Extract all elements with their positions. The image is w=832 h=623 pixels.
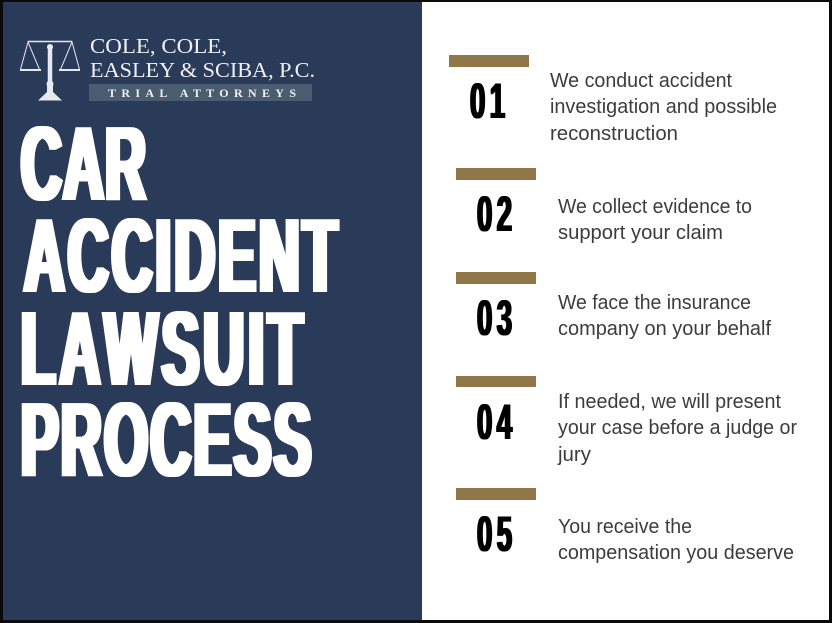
step 01 — [449, 55, 777, 145]
step 05 — [456, 488, 794, 564]
step 03 — [456, 272, 771, 346]
step 05: compensation you deserve — [558, 542, 794, 564]
step 02 — [456, 168, 752, 244]
title: PROCESS — [21, 380, 314, 498]
step 04: jury — [557, 444, 591, 466]
title: LAWSUIT — [21, 289, 307, 407]
step 05: You receive the — [558, 516, 692, 538]
step 03: 03 — [477, 289, 516, 346]
step 05: 05 — [477, 505, 516, 562]
panel: white right — [422, 2, 829, 620]
logo tagline: TRIAL ATTORNEYS — [108, 86, 296, 100]
step 04: your case before a judge or — [558, 417, 797, 439]
step 03: We face the insurance — [558, 292, 751, 314]
logo: Cole, Cole, Easley & Sciba — [20, 34, 315, 101]
logo: Cole, Cole, Easley & Sciba: EASLEY & SCIBA, P.C. — [90, 58, 315, 82]
title: CAR — [21, 104, 147, 222]
logo text: COLE, COLE, — [90, 34, 227, 58]
step 01: 01 — [470, 72, 509, 129]
icon: scales of justice — [20, 42, 80, 100]
step 04 — [456, 376, 797, 466]
step 01: reconstruction — [550, 123, 678, 145]
step 02: We collect evidence to — [558, 196, 752, 218]
step 02: support your claim — [558, 222, 723, 244]
logo band — [89, 84, 312, 101]
title — [21, 104, 340, 498]
title: ACCIDENT — [24, 196, 340, 314]
step 02: 02 — [477, 185, 516, 242]
step 04: 04 — [477, 393, 516, 450]
panel: navy left — [3, 2, 422, 620]
step 03: company on your behalf — [558, 318, 771, 340]
step 04: If needed, we will present — [558, 391, 781, 413]
step 01: investigation and possible — [550, 96, 777, 118]
step 01: We conduct accident — [550, 70, 732, 92]
